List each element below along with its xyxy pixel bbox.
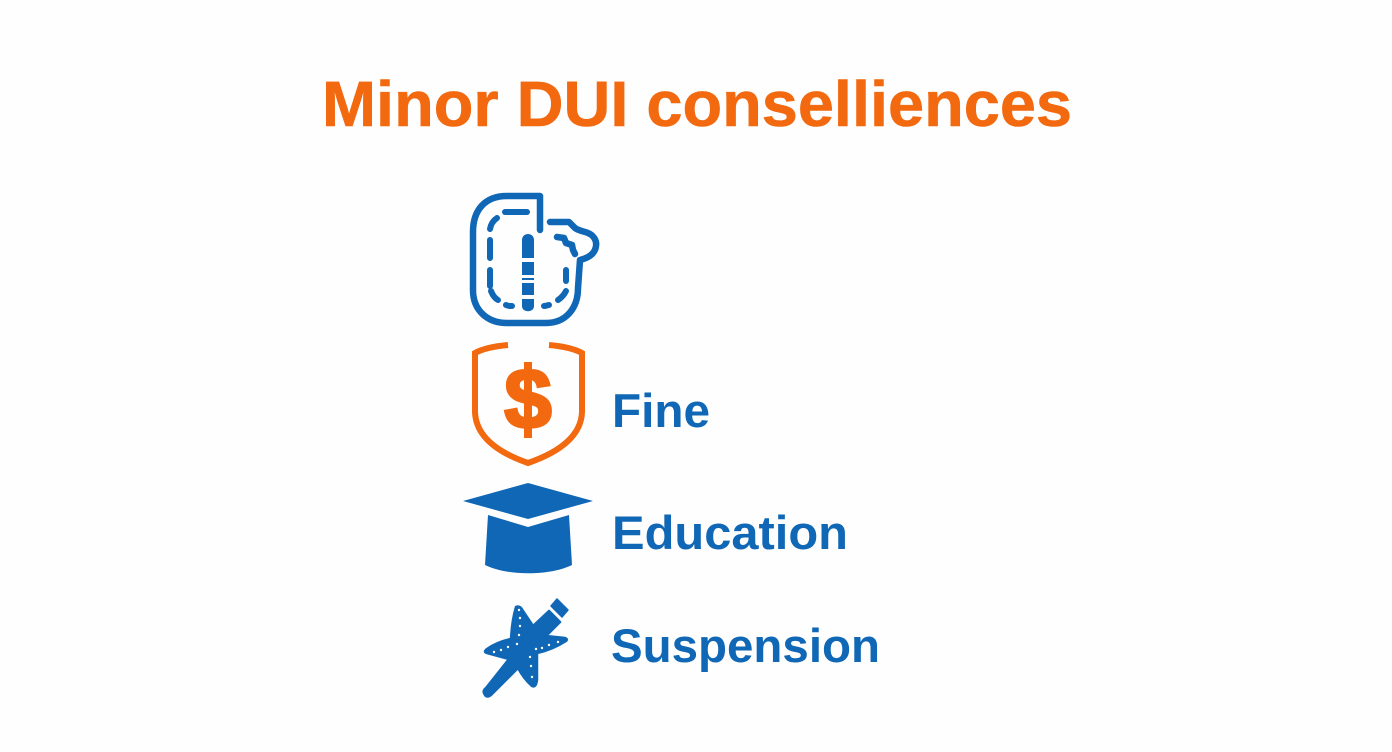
icon: graduation cap: [463, 483, 593, 573]
label: Education: Education: [612, 506, 848, 559]
stitched dots: [493, 609, 559, 678]
title: Minor DUI conselliences: [322, 68, 1072, 140]
exclamation segments: [522, 234, 534, 311]
label: Fine: Fine: [612, 384, 710, 437]
icon: dollar shield: [475, 345, 582, 463]
dollar sign: $: [504, 352, 552, 447]
label: Suspension: Suspension: [611, 619, 880, 672]
icon: star with pencil: [484, 599, 568, 696]
icon: bitten badge with exclamation mark: [473, 196, 596, 323]
